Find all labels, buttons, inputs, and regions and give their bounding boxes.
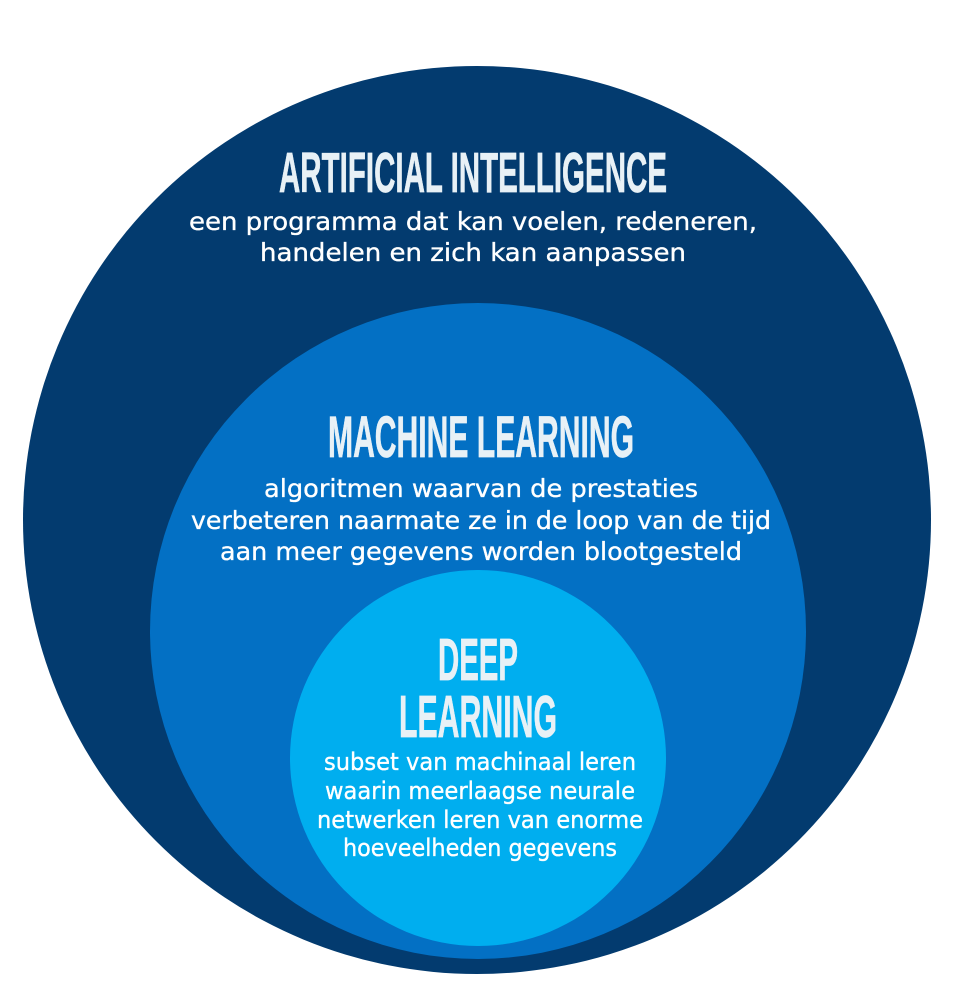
text: artificial intelligence description <box>189 207 757 267</box>
text: artificial intelligence description: een programma dat kan voelen, redeneren, <box>189 207 757 236</box>
text: artificial intelligence description: handelen en zich kan aanpassen <box>260 238 686 267</box>
heading: machine learning: MACHINE LEARNING <box>328 405 634 470</box>
text: deep learning description: netwerken leren van enorme <box>317 806 643 834</box>
text: deep learning description: waarin meerlaagse neurale <box>325 777 635 805</box>
heading: deep learning: LEARNING <box>399 684 557 750</box>
text: machine learning description <box>191 474 771 566</box>
text: deep learning description: hoeveelheden gegevens <box>343 834 617 862</box>
text: deep learning description <box>317 748 643 862</box>
inner circle: deep learning <box>290 570 666 946</box>
heading: deep learning <box>399 627 557 750</box>
text: deep learning description: subset van machinaal leren <box>324 748 636 776</box>
heading: deep learning: DEEP <box>438 627 518 693</box>
text: machine learning description: verbeteren naarmate ze in de loop van de tijd <box>191 506 771 535</box>
middle circle: machine learning <box>150 303 806 959</box>
text: machine learning description: algoritmen waarvan de prestaties <box>264 474 698 503</box>
text: machine learning description: aan meer gegevens worden blootgesteld <box>220 537 742 566</box>
